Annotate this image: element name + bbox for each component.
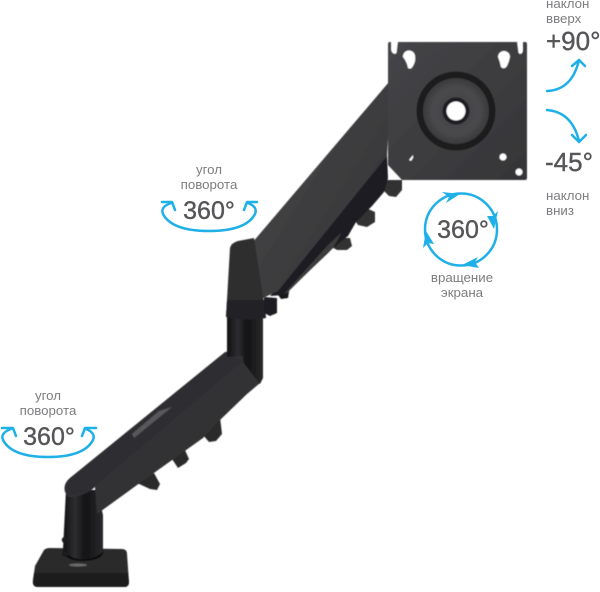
label: screen rotation: экрана bbox=[441, 285, 484, 300]
label: screen rotation: вращение bbox=[431, 270, 493, 285]
tilt indicator bbox=[545, 0, 600, 218]
label: elbow rotation angle: поворота bbox=[181, 177, 238, 192]
elbow cap bbox=[226, 238, 266, 319]
upper arm tabs bbox=[276, 180, 402, 299]
plate ring bbox=[416, 72, 496, 150]
upper arm strip bbox=[284, 232, 342, 294]
lower arm bbox=[65, 345, 263, 514]
lower arm tabs bbox=[137, 417, 222, 490]
arrow: elbow rotation bbox=[162, 202, 257, 231]
label: tilt up: вверх bbox=[546, 11, 582, 26]
elbow column bbox=[227, 317, 263, 384]
keyhole right bbox=[498, 51, 510, 68]
label: base rotation angle: поворота bbox=[20, 403, 77, 418]
plate hub bbox=[442, 98, 470, 124]
label: tilt down: наклон bbox=[546, 188, 589, 203]
value: minus 45 degrees: -45° bbox=[545, 147, 593, 177]
lower arm top face bbox=[65, 353, 243, 495]
column screws bbox=[62, 537, 68, 557]
label: tilt down: вниз bbox=[546, 203, 574, 218]
upper arm bbox=[252, 82, 389, 298]
value: plus 90 degrees: +90° bbox=[546, 26, 600, 56]
value: 360 degrees elbow: 360° bbox=[183, 197, 235, 225]
rotation indicator: elbow bbox=[162, 162, 257, 231]
plate hole bbox=[446, 102, 466, 120]
label: elbow rotation angle: угол bbox=[196, 162, 222, 177]
screen rotation indicator bbox=[423, 192, 498, 300]
arrow: base rotation bbox=[2, 428, 96, 457]
value: 360 degrees screen: 360° bbox=[437, 216, 489, 244]
monitor arm bbox=[33, 42, 527, 587]
label: base rotation angle: угол bbox=[35, 388, 61, 403]
elbow band bbox=[226, 300, 266, 319]
arrow: tilt down bbox=[547, 110, 586, 142]
rotation indicator: base bbox=[2, 388, 96, 457]
lower column bbox=[63, 490, 103, 559]
arrow: tilt up bbox=[547, 60, 585, 91]
plate disc bbox=[423, 78, 489, 144]
value: 360 degrees base: 360° bbox=[23, 423, 75, 451]
arrow: screen rotation circle bbox=[423, 192, 498, 268]
upper arm rail bbox=[270, 155, 388, 296]
mounting plate bbox=[388, 42, 527, 180]
elbow bracket bbox=[264, 297, 277, 316]
keyhole left bbox=[403, 50, 415, 69]
sticker on lower arm bbox=[132, 407, 172, 438]
plate screw holes bbox=[409, 154, 522, 176]
base clamp bbox=[33, 548, 129, 587]
